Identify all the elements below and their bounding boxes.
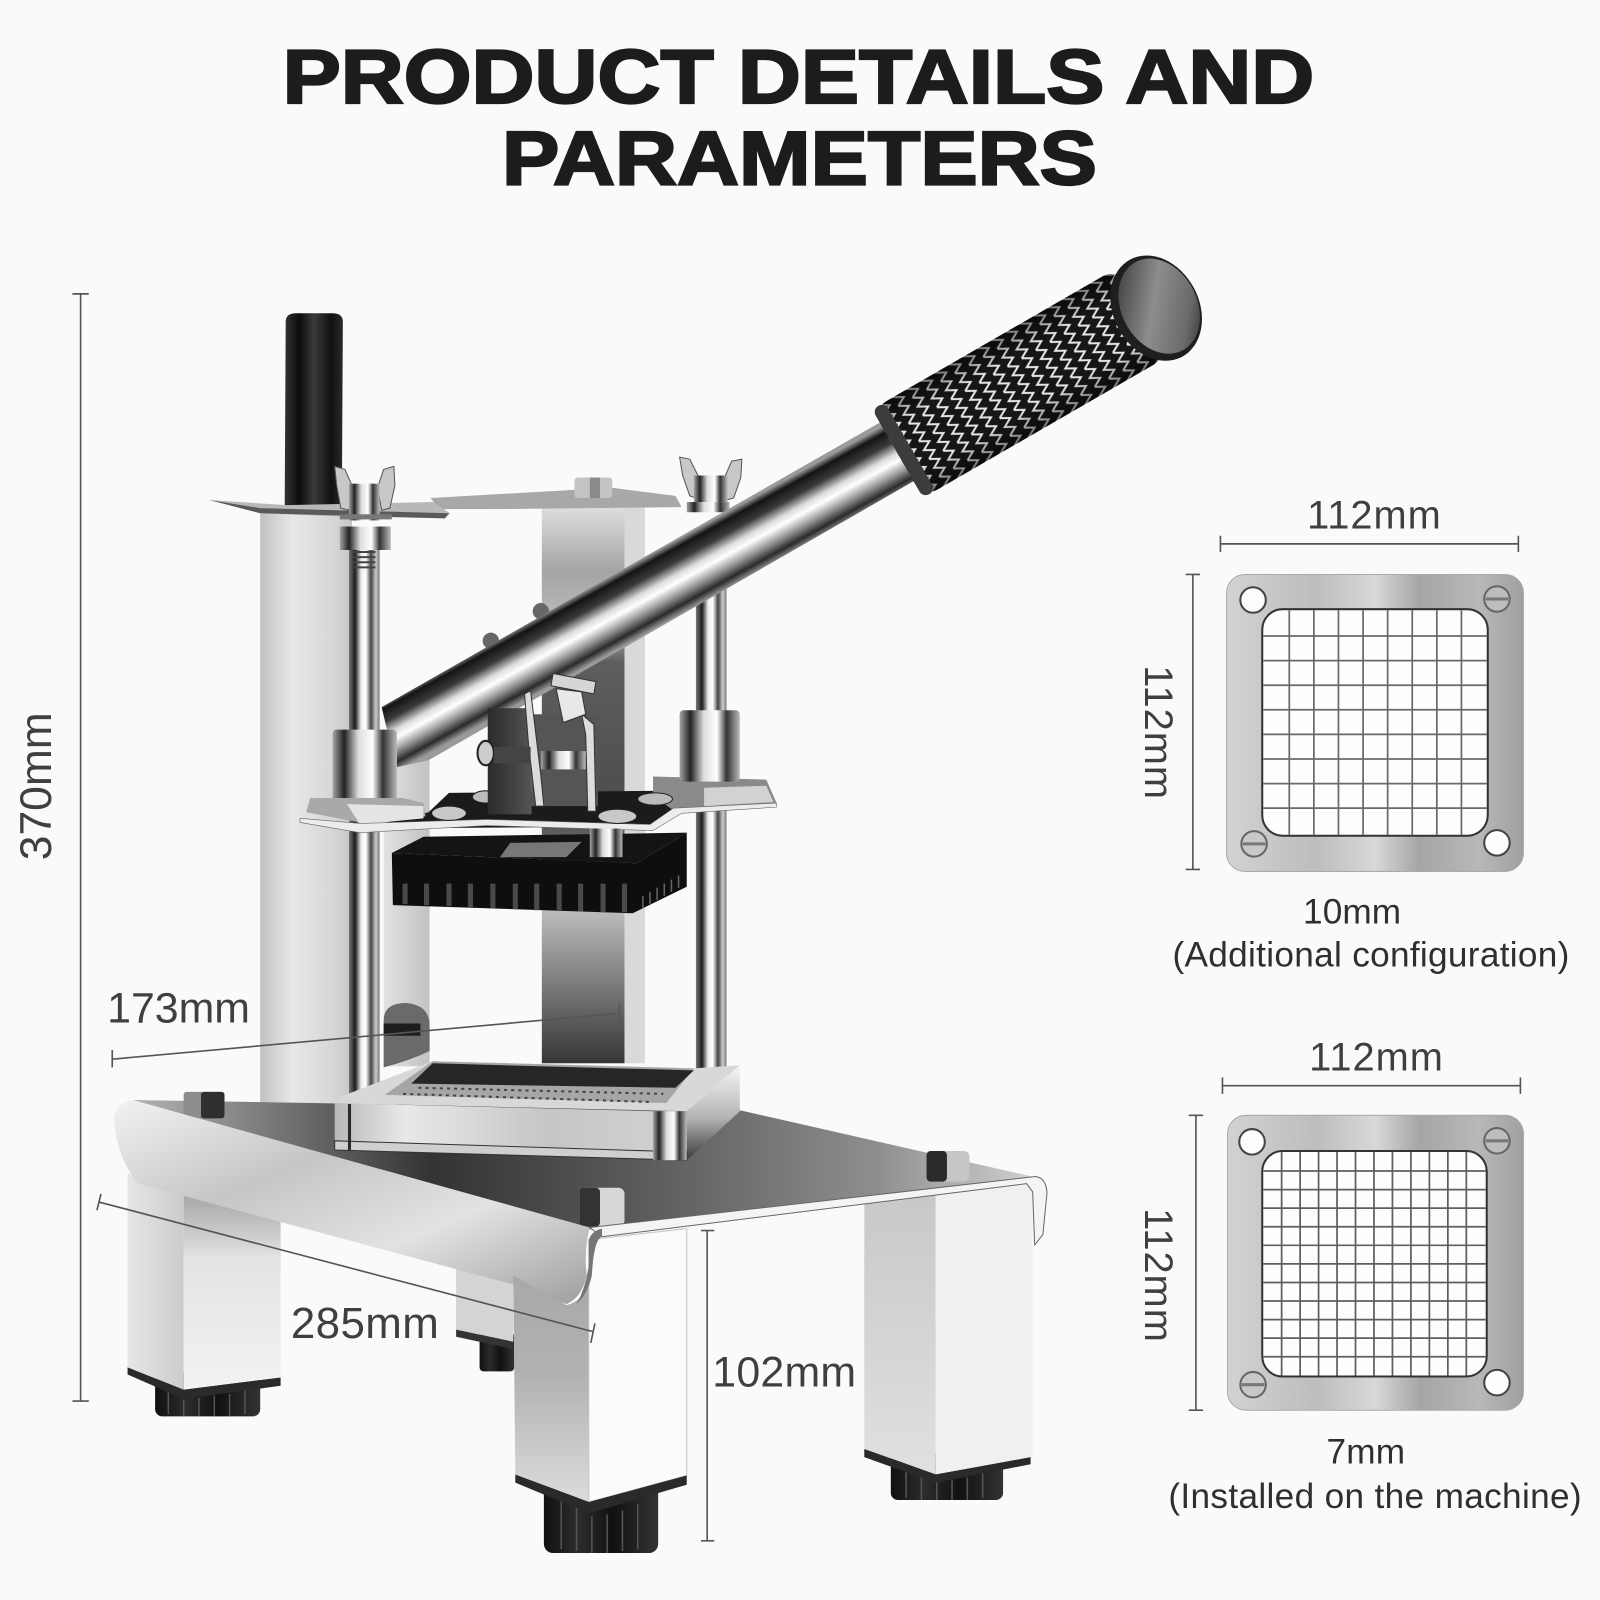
lower tray [335,1061,740,1160]
right rod collar [680,710,740,782]
width dimension 112mm [1222,1035,1520,1094]
knurled grip [872,239,1220,498]
dimension: width 285mm: 285mm [291,1299,439,1348]
dimension: depth 173mm [107,984,619,1067]
rear left post [260,508,352,1141]
10mm caption: (Additional configuration) [1172,935,1569,974]
base plate top surface [133,1100,1041,1230]
rear right post [542,507,645,1063]
height dimension 112mm [1136,1115,1203,1410]
height dimension 112mm [1136,574,1200,869]
left leg [128,1173,281,1416]
lever arm [382,412,931,767]
pivot bracket [478,673,598,814]
product illustration: manual vegetable dicer [114,239,1220,1553]
black blade pusher block [392,829,687,913]
7mm caption: 7mm [1327,1432,1405,1471]
left rod collar [333,730,397,805]
top plate [209,478,682,518]
title: PRODUCT DETAILS AND [283,35,1314,120]
height dimension 112mm: 112mm [1136,1208,1180,1342]
dimension: depth 173mm: 173mm [107,984,250,1032]
wing nuts [335,457,742,550]
base bolts [184,1092,969,1227]
moving mid plate [300,777,777,833]
10mm blade plate [1227,574,1523,871]
dimension: height 370mm: 370mm [12,712,61,860]
front leg [513,1229,687,1553]
width dimension 112mm: 112mm [1309,1035,1443,1079]
dimension: leg height 102mm [701,1231,856,1541]
dimension: height 370mm [12,294,89,1401]
10mm caption [1172,892,1569,974]
inner support and rear roller [384,760,430,1067]
dimension: leg height 102mm: 102mm [712,1349,856,1397]
panel: 10mm blade [1136,494,1569,974]
grip end cap [1092,239,1220,377]
right leg [864,1184,1033,1500]
back leg [456,1265,514,1371]
front left flange of base [114,1100,590,1304]
7mm caption [1168,1432,1582,1516]
title: PARAMETERS [502,117,1097,202]
dimension: width 285mm [97,1194,595,1348]
10mm caption: 10mm [1303,892,1401,931]
black push handle [285,313,343,507]
7mm blade plate [1228,1115,1523,1410]
7mm caption: (Installed on the machine) [1168,1477,1582,1516]
front right rim of base [590,1177,1047,1245]
height dimension 112mm: 112mm [1136,665,1180,799]
cutting guide rods [349,541,727,1102]
width dimension 112mm: 112mm [1307,494,1441,538]
title [283,35,1314,202]
panel: 7mm blade [1136,1035,1582,1516]
width dimension 112mm [1220,494,1518,552]
